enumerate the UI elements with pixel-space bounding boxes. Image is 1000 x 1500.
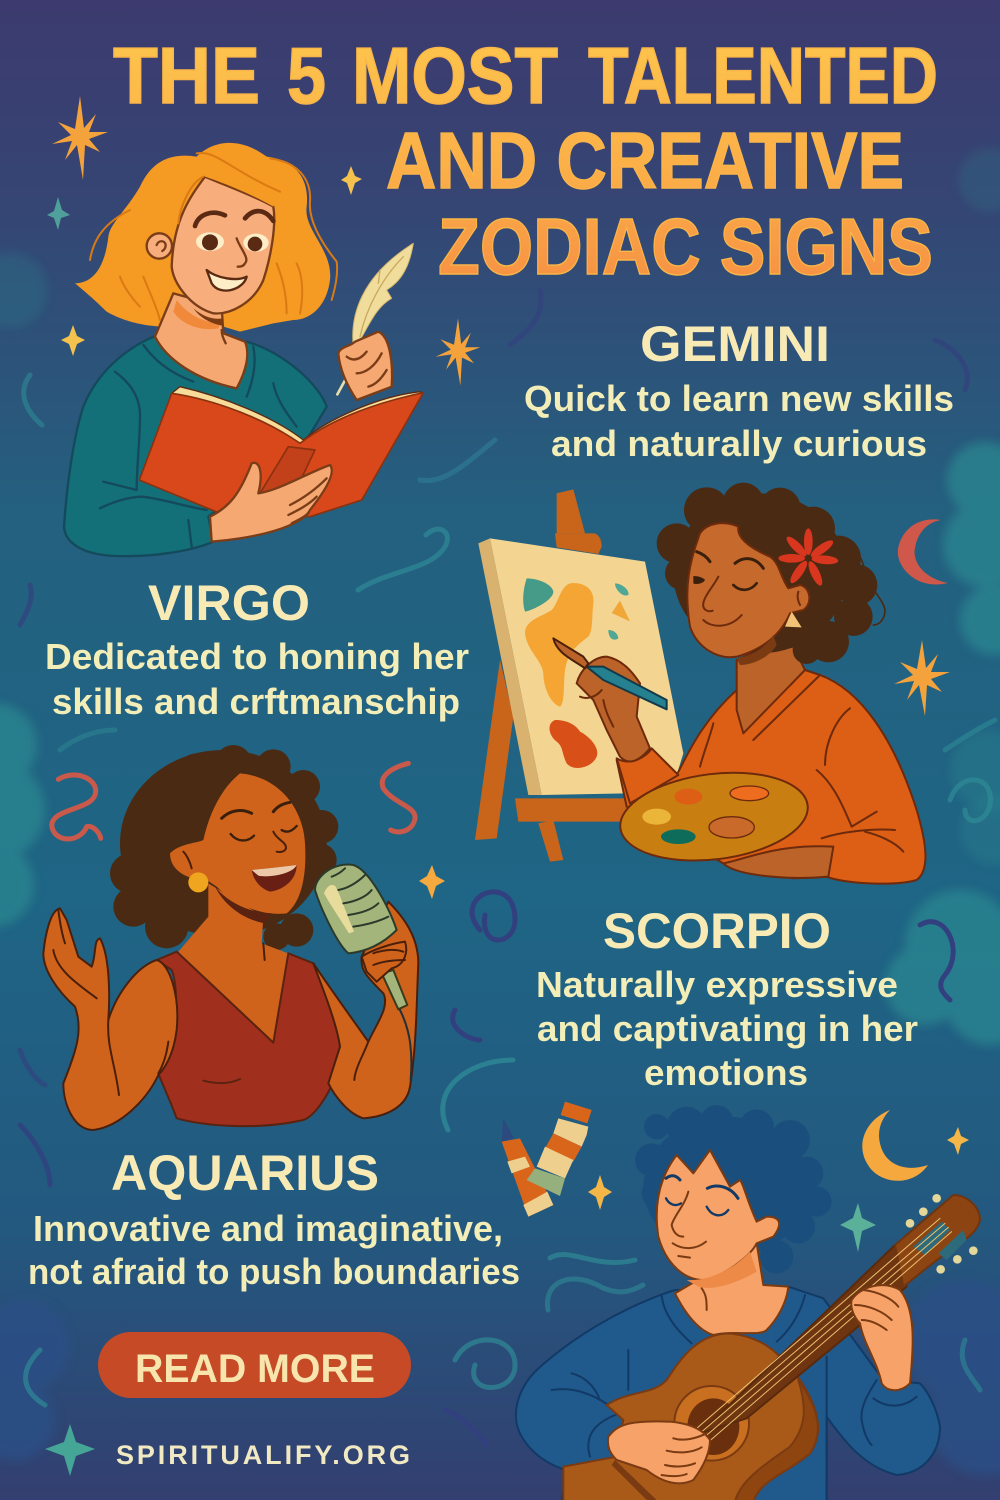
icon: red squiggles [52,763,415,839]
text: Aquarius description: Innovative and imaginative, [33,1208,503,1249]
text: Aquarius description: not afraid to push boundaries [28,1251,520,1292]
text: Virgo description: skills and crftmanschip [52,681,460,722]
button: read more: READ MORE [135,1347,375,1391]
text: Scorpio description: and captivating in her [537,1008,918,1049]
title: MOST [352,31,558,120]
title [113,31,938,291]
illustration: singer with microphone [43,745,418,1130]
text: Scorpio description: Naturally expressive [536,964,898,1005]
title: 5 [287,31,326,120]
button: read more [98,1332,411,1398]
heading: Gemini: GEMINI [640,316,830,372]
heading: Aquarius: AQUARIUS [111,1145,379,1201]
title: TALENTED [588,31,938,120]
illustration: writer with book and quill [64,143,423,556]
text: Gemini description: and naturally curious [551,423,927,464]
text: Scorpio description: emotions [644,1052,808,1093]
text: Gemini description [524,378,954,464]
title: ZODIAC SIGNS [438,202,933,291]
footer: website: SPIRITUALIFY.ORG [116,1440,410,1470]
heading: Virgo: VIRGO [148,575,310,631]
heading: Scorpio: SCORPIO [603,903,831,959]
illustration: painter at easel [475,483,925,884]
text: Virgo description [45,636,469,722]
text: Aquarius description [28,1208,520,1292]
title: AND CREATIVE [386,116,904,205]
text: Virgo description: Dedicated to honing her [45,636,469,677]
title: THE [113,31,260,120]
icon: paint tubes [502,1102,592,1217]
text: Scorpio description [536,964,918,1093]
text: Gemini description: Quick to learn new skills [524,378,954,419]
icon: crescent moon (coral) [898,519,948,584]
illustration: guitarist [516,1105,980,1500]
icon: crescent moon (gold) [862,1110,928,1181]
